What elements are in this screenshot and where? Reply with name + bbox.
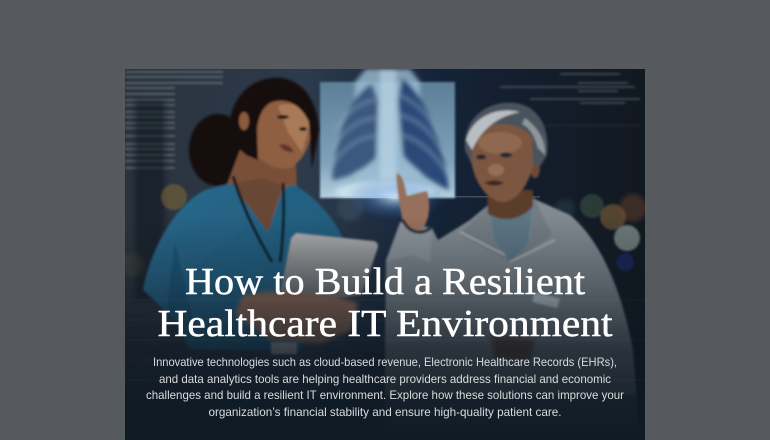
hands on tablet — [235, 292, 358, 344]
infographic canvas — [125, 69, 645, 440]
tablet — [280, 233, 378, 300]
hair — [229, 78, 319, 168]
description text — [146, 355, 624, 419]
hair highlights — [466, 110, 520, 150]
spine glow — [380, 69, 396, 199]
face — [255, 99, 312, 169]
hair bun — [189, 114, 247, 186]
inner shirt — [488, 205, 533, 262]
bokeh lights — [120, 184, 647, 277]
ear — [239, 112, 249, 130]
hair back — [465, 103, 548, 165]
coat — [384, 198, 636, 395]
description text: and data analytics tools are helping healthcare providers address financial and economic — [159, 372, 611, 386]
bright base — [334, 179, 437, 198]
doctor's hand and name tag — [490, 335, 535, 360]
hand — [397, 173, 429, 232]
figure: doctor in white coat — [384, 102, 636, 395]
description text: organization’s financial stability and ensure high-quality patient care. — [208, 405, 562, 419]
bottom dark overlay — [125, 215, 645, 440]
title: Healthcare IT Environment — [158, 303, 613, 345]
description text: challenges and build a resilient IT environment. Explore how these solutions can improve your — [146, 388, 624, 402]
right lung — [398, 78, 449, 190]
background data text: right — [500, 72, 640, 105]
ear — [530, 158, 540, 178]
background data text: left — [125, 71, 223, 169]
sleeve — [388, 224, 431, 260]
eyes and lips — [476, 152, 512, 160]
lanyard — [233, 176, 284, 262]
v neck chest — [232, 178, 282, 232]
background dark column — [135, 100, 165, 300]
lapels — [464, 198, 551, 254]
id badge — [271, 342, 297, 354]
panel: hero photo — [120, 69, 647, 440]
title: How to Build a Resilient — [185, 261, 585, 303]
title — [158, 261, 613, 345]
eyes and lips — [277, 115, 307, 131]
figure: nurse in blue scrubs — [143, 78, 343, 350]
description text: Innovative technologies such as cloud-based revenue, Electronic Healthcare Records (EHRs), — [153, 355, 617, 369]
neck — [226, 148, 298, 223]
neck — [487, 190, 533, 219]
face — [472, 124, 533, 202]
scrub shadow — [166, 246, 184, 322]
left lung — [332, 84, 378, 180]
scrubs — [143, 183, 343, 350]
x-ray hand glow — [350, 178, 440, 218]
background grid texture — [125, 300, 645, 380]
ribs — [332, 95, 448, 175]
x-ray panel — [320, 69, 455, 203]
cuff — [403, 220, 431, 232]
